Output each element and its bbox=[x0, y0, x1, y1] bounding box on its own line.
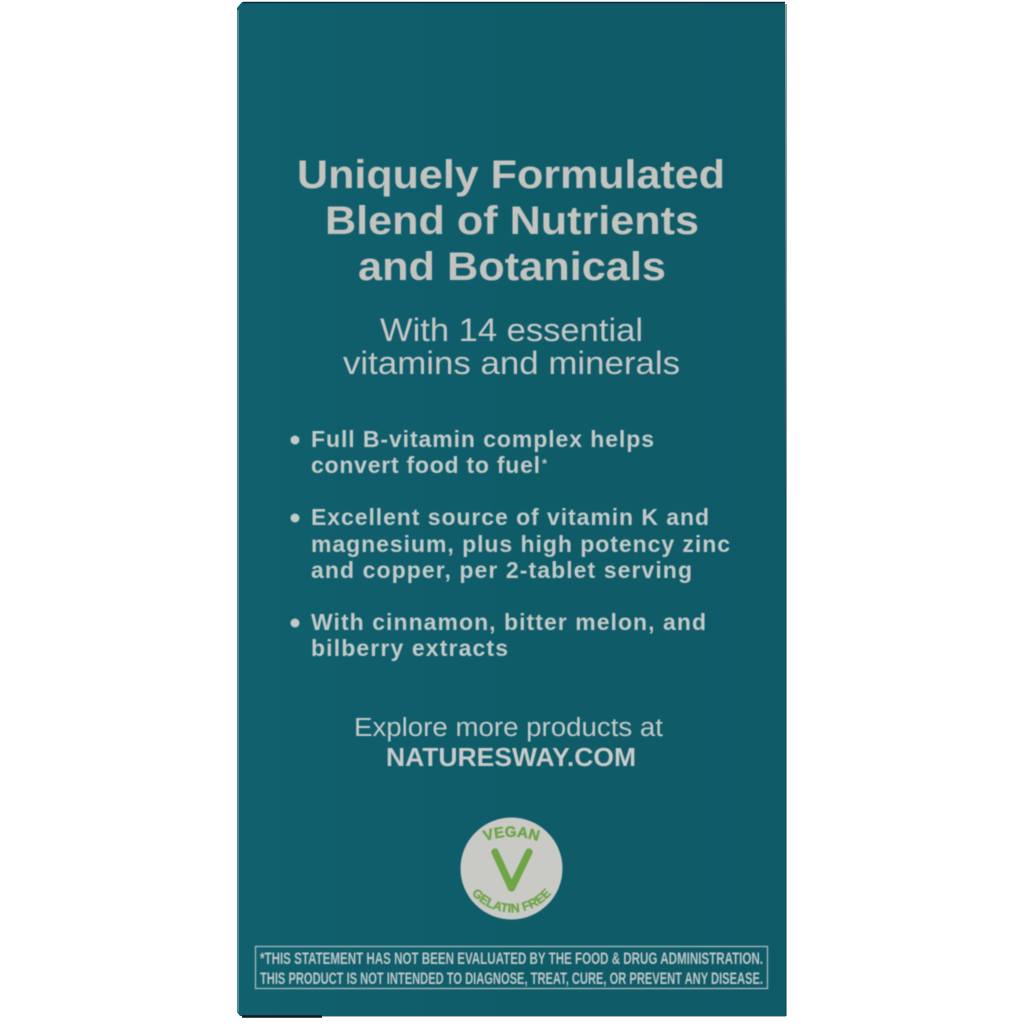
subheading: vitamins and minerals bbox=[343, 345, 680, 381]
bullet 1: Full B-vitamin complex helps bbox=[311, 426, 654, 452]
bullet 1: * bbox=[542, 456, 548, 471]
bullet 2: and copper, per 2-tablet serving bbox=[311, 557, 692, 583]
subheading bbox=[343, 312, 680, 381]
icon: vegan gelatin free badge: GELATIN FREE bbox=[472, 888, 552, 914]
panel: teal box back bbox=[237, 2, 786, 1016]
icon: vegan gelatin free badge bbox=[460, 816, 564, 920]
website call to action: Explore more products at bbox=[354, 714, 663, 742]
subheading: With 14 essential bbox=[380, 312, 643, 348]
heading: Blend of Nutrients bbox=[325, 199, 699, 243]
website call to action: NATURESWAY.COM bbox=[386, 742, 636, 772]
bullet 3 bbox=[290, 609, 706, 661]
icon: vegan gelatin free badge: VEGAN bbox=[482, 826, 540, 842]
bullet 3: With cinnamon, bitter melon, and bbox=[311, 609, 706, 635]
bullet 2 bbox=[290, 504, 730, 583]
heading: and Botanicals bbox=[358, 245, 666, 289]
bullet list bbox=[290, 426, 730, 661]
website call to action bbox=[354, 714, 663, 772]
bullet 3: bilberry extracts bbox=[311, 635, 508, 661]
heading bbox=[297, 153, 725, 289]
disclaimer box: *THIS STATEMENT HAS NOT BEEN EVALUATED BY THE FOOD & DRUG ADMINISTRATION. bbox=[260, 950, 763, 968]
heading: Uniquely Formulated bbox=[297, 153, 725, 197]
bullet 2: magnesium, plus high potency zinc bbox=[311, 531, 730, 557]
bullet 1: convert food to fuel bbox=[311, 452, 540, 478]
disclaimer box: THIS PRODUCT IS NOT INTENDED TO DIAGNOSE, TREAT, CURE, OR PREVENT ANY DISEASE. bbox=[260, 970, 763, 988]
bullet 1 bbox=[290, 426, 654, 478]
disclaimer box bbox=[256, 946, 768, 988]
bullet 2: Excellent source of vitamin K and bbox=[311, 504, 709, 530]
